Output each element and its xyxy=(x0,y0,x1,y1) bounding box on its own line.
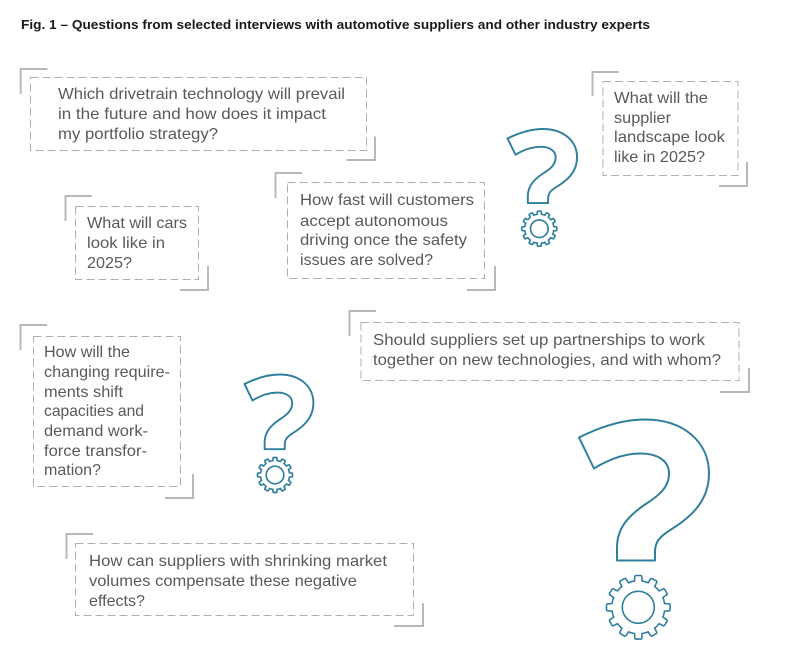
panel: supplier landscape question: like in 2025? xyxy=(614,149,705,166)
panel: autonomous driving question: issues are solved? xyxy=(300,252,433,269)
icon: large question mark with gear xyxy=(579,420,709,639)
icon: question mark with gear, top right xyxy=(508,129,577,246)
panel: workforce question: force transfor- xyxy=(44,443,147,460)
panel: supplier landscape question xyxy=(592,72,747,186)
panel: partnerships question xyxy=(350,311,749,392)
panel: drivetrain question: in the future and how does it impact xyxy=(58,106,327,123)
panel: workforce question: demand work- xyxy=(44,423,148,440)
panel: partnerships question: Should suppliers set up partnerships to work xyxy=(373,332,706,349)
panel: workforce question: mation? xyxy=(44,462,101,479)
panel: autonomous driving question: accept autonomous xyxy=(300,213,448,230)
panel: shrinking market question xyxy=(66,534,423,626)
panel: cars question: look like in xyxy=(87,235,165,252)
panel: workforce question xyxy=(20,325,193,498)
panel: drivetrain question: Which drivetrain technology will prevail xyxy=(58,86,345,103)
panel: cars question: What will cars xyxy=(87,215,187,232)
panel: cars question xyxy=(66,196,208,290)
panel: workforce question: How will the xyxy=(44,344,130,361)
panel: partnerships question: together on new technologies, and with whom? xyxy=(373,352,721,369)
panel: workforce question: changing require- xyxy=(44,364,170,381)
panel: autonomous driving question: driving once the safety xyxy=(300,232,467,249)
panel: drivetrain question: my portfolio strategy? xyxy=(58,126,218,143)
panel: workforce question: ments shift xyxy=(44,384,124,401)
panel: workforce question: capacities and xyxy=(44,403,144,420)
panel: cars question: 2025? xyxy=(87,255,132,272)
title: Fig. 1 – Questions from selected interviews with automotive suppliers and other industry experts xyxy=(21,18,650,32)
panel: autonomous driving question: How fast will customers xyxy=(300,192,474,209)
panel: shrinking market question: How can suppliers with shrinking market xyxy=(89,553,388,570)
panel: shrinking market question: volumes compensate these negative xyxy=(89,573,357,590)
panel: autonomous driving question xyxy=(276,173,495,290)
panel: shrinking market question: effects? xyxy=(89,593,145,610)
panel: supplier landscape question: What will the xyxy=(614,90,708,107)
panel: supplier landscape question: supplier xyxy=(614,110,672,127)
panel: drivetrain question xyxy=(21,69,375,160)
panel: supplier landscape question: landscape look xyxy=(614,129,726,146)
icon: question mark with gear, centre left xyxy=(244,374,313,492)
